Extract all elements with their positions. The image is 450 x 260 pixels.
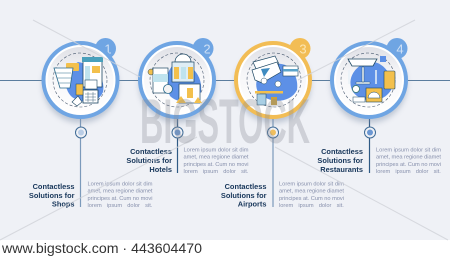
connector 1 xyxy=(80,118,82,207)
circle badge 1: 1 xyxy=(104,42,112,56)
heading: shops: Solutions for xyxy=(29,191,75,200)
body text: airports: lorem ipsum dolor sit. xyxy=(279,203,344,209)
body text: restaurants: principes at. Cum no movi xyxy=(376,162,441,168)
body text: hotels: Lorem ipsum dolor sit dim xyxy=(184,148,249,154)
body text: shops: lorem ipsum dolor sit. xyxy=(88,203,153,209)
connector 2 xyxy=(176,118,178,173)
circle badge 1 xyxy=(42,38,118,123)
body text: airports: principes at. Cum no movi xyxy=(279,196,344,202)
icon: restaurant xyxy=(341,53,395,107)
heading: airports: Solutions for xyxy=(221,191,267,200)
step 2: hotels xyxy=(126,38,249,175)
icon: airport xyxy=(247,53,301,107)
heading: restaurants: Restaurants xyxy=(320,165,363,174)
heading: shops: Shops xyxy=(52,200,74,208)
heading: hotels: Hotels xyxy=(149,165,172,174)
connector 4 xyxy=(368,118,370,173)
circle badge 2: 2 xyxy=(203,42,211,56)
body text: shops: principes at. Cum no movi xyxy=(88,196,152,202)
heading: restaurants: Solutions for xyxy=(317,156,363,165)
heading: hotels: Contactless xyxy=(130,147,172,156)
circle badge 3: 3 xyxy=(299,42,307,56)
icon: shop xyxy=(53,53,107,107)
body text: airports: Lorem ipsum dolor sit dim xyxy=(279,182,344,188)
body text: airports: amet, mea regione diamet xyxy=(279,189,344,195)
circle badge 3 xyxy=(235,38,311,123)
step 1: shops xyxy=(29,38,153,209)
horizontal timeline xyxy=(0,80,450,82)
step 3: airports xyxy=(221,38,344,209)
marker 4 xyxy=(364,127,376,138)
body text: restaurants: Lorem ipsum dolor sit dim xyxy=(376,148,441,154)
heading: hotels: Solutions for xyxy=(126,156,172,165)
body text: shops: amet, mea regione diamet xyxy=(88,189,153,195)
circle badge 4: 4 xyxy=(396,42,404,56)
step 4: restaurants xyxy=(317,38,441,175)
body text: restaurants: lorem ipsum dolor sit. xyxy=(376,169,441,175)
heading: airports: Airports xyxy=(238,200,266,208)
body text: hotels: amet, mea regione diamet xyxy=(184,155,249,161)
marker 1 xyxy=(76,127,86,138)
heading: restaurants: Contactless xyxy=(321,147,363,156)
marker 3 xyxy=(268,127,278,138)
icon: hotel xyxy=(148,53,204,107)
heading: airports: Contactless xyxy=(225,182,266,191)
body text: shops: Lorem ipsum dolor sit dim xyxy=(88,182,153,188)
connector 3 xyxy=(272,118,274,207)
heading: shops: Contactless xyxy=(33,182,74,191)
body text: hotels: principes at. Cum no movi xyxy=(184,162,248,168)
marker 2 xyxy=(172,127,183,138)
body text: hotels: lorem ipsum dolor sit. xyxy=(184,169,249,175)
body text: restaurants: amet, mea regione diamet xyxy=(376,155,441,161)
footer URL: www.bigstock.com · 443604470 xyxy=(1,240,202,256)
